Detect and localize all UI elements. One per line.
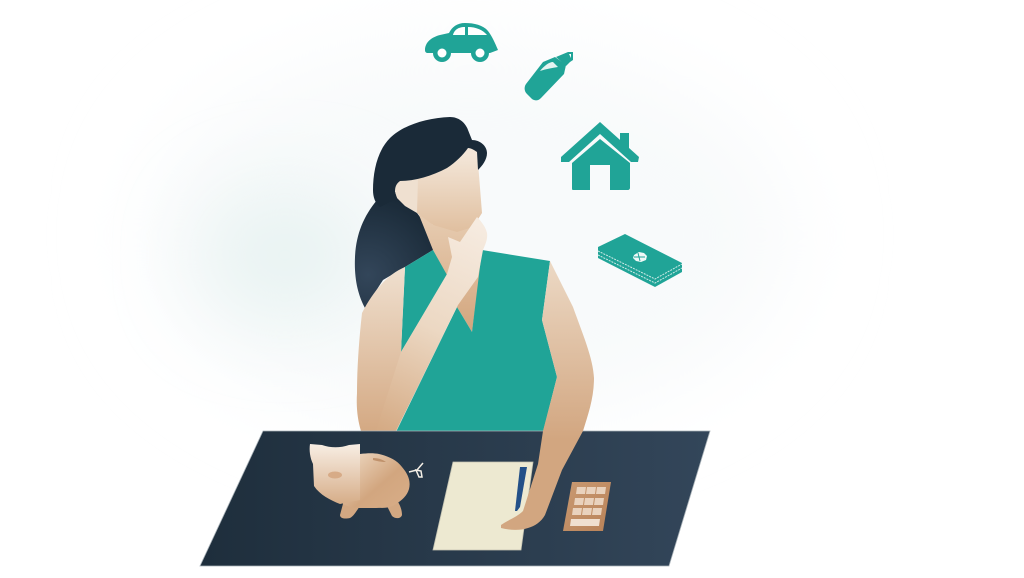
face	[410, 145, 482, 232]
neck	[417, 210, 483, 332]
right arm and hand on paper	[501, 261, 594, 530]
forearm and hand	[376, 217, 487, 431]
desk	[200, 431, 710, 566]
icon: baby bottle	[525, 52, 573, 100]
pen	[515, 467, 527, 511]
hair	[373, 117, 487, 207]
shirt	[401, 250, 447, 352]
icon: car	[425, 23, 498, 62]
piggy bank	[310, 444, 423, 519]
ear	[395, 178, 418, 213]
ponytail	[355, 190, 433, 308]
notepad	[433, 462, 533, 550]
icon: stack of money	[598, 234, 682, 287]
figure: woman	[355, 117, 557, 432]
icon: house	[561, 122, 639, 190]
calculator	[563, 482, 611, 531]
left upper arm	[357, 267, 446, 431]
